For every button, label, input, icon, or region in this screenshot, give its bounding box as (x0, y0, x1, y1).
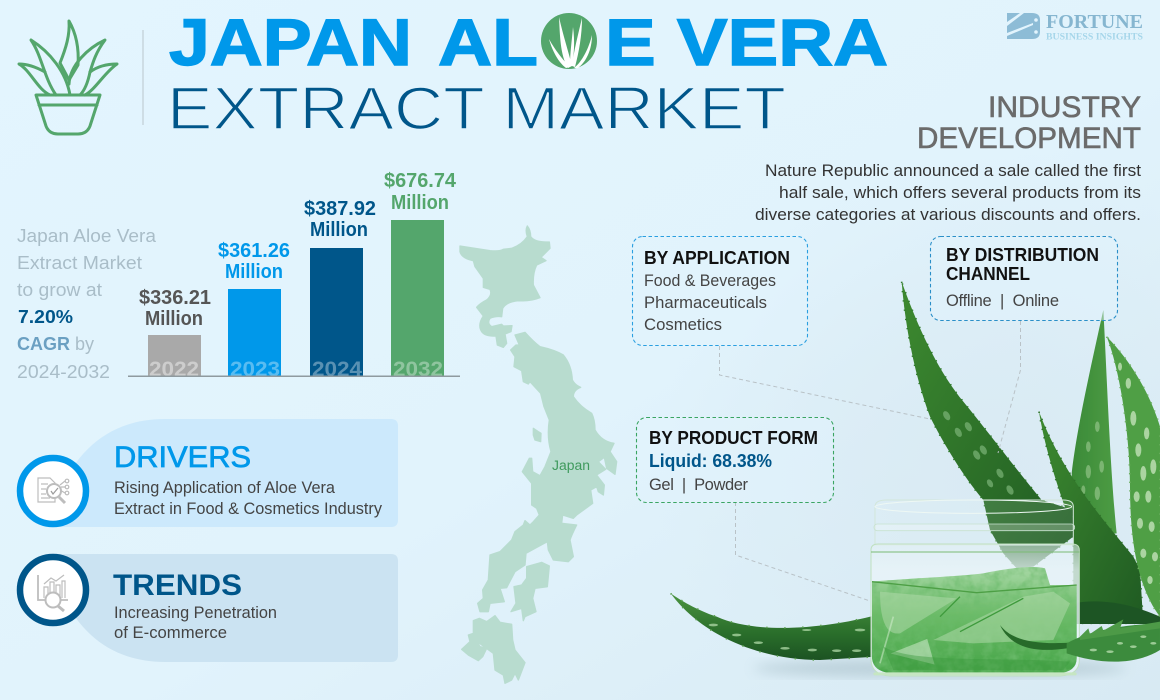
callout: by application: Food & Beverages (644, 272, 776, 290)
bar 2023: 2023 (230, 358, 280, 381)
title line 1: JAPAN (169, 5, 412, 79)
heading: industry development: INDUSTRY (988, 91, 1141, 124)
CAGR text block (17, 226, 157, 382)
aloe leaf: middle (1039, 412, 1143, 623)
heading: industry development: DEVELOPMENT (917, 122, 1141, 155)
glass jar (871, 500, 1079, 676)
bar 2024: $387.92 (304, 198, 376, 220)
bar 2032 (384, 170, 457, 381)
aloe leaf: big centre (902, 282, 1073, 568)
map of Japan (460, 226, 617, 683)
industry development text: diverse categories at various discounts and offers. (755, 205, 1141, 224)
logo: Fortune Business Insights: FORTUNE (1046, 11, 1143, 33)
industry development text: Nature Republic announced a sale called the first (765, 161, 1141, 180)
bar 2023: $361.26 (218, 240, 290, 262)
bar 2022: $336.21 (139, 287, 211, 309)
bar 2024: 2024 (312, 358, 362, 381)
bar 2023: Million (225, 261, 283, 283)
bar 2024 (304, 198, 376, 381)
chart axis (128, 376, 460, 377)
connector: application (720, 346, 930, 419)
icon: drivers (20, 458, 86, 524)
callout: by application: Cosmetics (644, 316, 722, 334)
bar 2023 (218, 240, 290, 381)
CAGR text block: to grow at (17, 280, 102, 300)
trends text: of E-commerce (114, 624, 227, 642)
trends text (114, 604, 277, 642)
bar 2032: $676.74 (384, 170, 457, 192)
title line 1 (169, 5, 888, 79)
map label: Japan: Japan (552, 458, 590, 473)
drivers text: Rising Application of Aloe Vera (114, 479, 336, 497)
title line 1: E VERA (605, 5, 888, 79)
title (167, 5, 888, 142)
callout: by distribution channel (930, 236, 1118, 320)
aloe leaf: bottom right (1067, 619, 1160, 662)
jar neck (875, 500, 1073, 545)
trends text: Increasing Penetration (114, 604, 277, 622)
callout: by application: Pharmaceuticals (644, 294, 767, 312)
drivers text: Extract in Food & Cosmetics Industry (114, 500, 383, 518)
callout: by distribution channel: CHANNEL (946, 264, 1030, 284)
icon: aloe in circle as letter O (541, 13, 597, 69)
jar body (871, 544, 1079, 676)
callout: by application: BY APPLICATION (644, 248, 790, 268)
trends heading: TRENDS (113, 569, 242, 602)
connector: distribution channel (998, 321, 1020, 453)
callout: by product form: Liquid: 68.38% (649, 451, 772, 471)
heading: industry development (917, 91, 1141, 155)
logo: Fortune Business Insights: BUSINESS INSIGHTS (1046, 32, 1143, 42)
industry development text: half sale, which offers several products from its (779, 183, 1141, 202)
industry development text (755, 161, 1141, 224)
aloe leaf: bottom left (671, 593, 877, 660)
CAGR text block: CAGR by (17, 334, 94, 354)
title line 2: EXTRACT MARKET (167, 75, 786, 142)
aloe leaf: tall back (1072, 310, 1117, 537)
icon: aloe plant in pot (19, 21, 117, 134)
jar gel (872, 567, 1077, 673)
drivers heading: DRIVERS (114, 441, 251, 474)
CAGR text block: Extract Market (17, 253, 142, 273)
bar 2024: Million (310, 219, 368, 241)
logo: Fortune Business Insights (1007, 11, 1143, 42)
title line 1: AL (438, 5, 538, 79)
CAGR text block: Japan Aloe Vera (17, 226, 157, 246)
callout: by distribution channel: Offline | Online (946, 292, 1059, 310)
callout: by product form (636, 418, 834, 502)
bar chart (128, 170, 460, 381)
bar 2032: 2032 (393, 358, 443, 381)
aloe leaf: lower dark base (1073, 601, 1160, 624)
panel: drivers (20, 419, 398, 527)
bar 2032: Million (391, 192, 449, 214)
panel: trends (20, 554, 398, 662)
photo shadow (753, 659, 1127, 678)
photo: aloe leaves and glass jar (671, 282, 1160, 678)
connector: product form (736, 502, 870, 601)
aloe leaf: right front (1107, 337, 1160, 617)
divider (142, 30, 144, 125)
bar 2022: 2022 (149, 358, 199, 381)
callout: by application (632, 236, 808, 346)
bar 2022: Million (145, 308, 203, 330)
CAGR text block: 2024-2032 (17, 362, 110, 382)
callout: by product form: BY PRODUCT FORM (649, 428, 818, 448)
bar 2022 (139, 287, 211, 381)
drivers text (114, 479, 383, 518)
callout: by distribution channel: BY DISTRIBUTION (946, 245, 1099, 265)
icon: trends (20, 557, 86, 623)
callout: by product form: Gel | Powder (649, 476, 748, 494)
CAGR text block: 7.20% (18, 307, 73, 327)
